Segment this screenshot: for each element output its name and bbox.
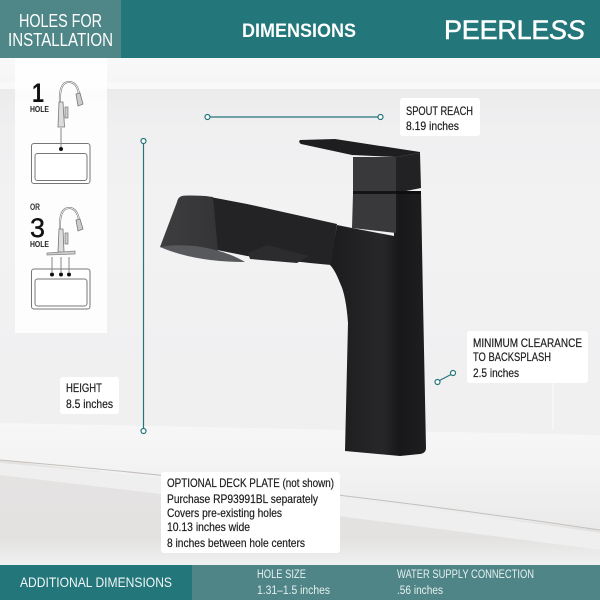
text: water supply connection [397, 569, 534, 597]
neck [205, 196, 337, 265]
callout: height [60, 377, 119, 414]
column [330, 193, 426, 456]
text: hole size [257, 569, 330, 597]
lower block [352, 194, 396, 233]
text: hole size: 1.31–1.5 inches [257, 585, 330, 597]
callout: optional deck plate: OPTIONAL DECK PLATE (not shown) [167, 476, 334, 490]
text: water supply connection: WATER SUPPLY CONNECTION [397, 569, 534, 581]
callout: spout reach: 8.19 inches [406, 119, 459, 133]
icon: three hole faucet and sink [30, 202, 90, 309]
text: hole size: HOLE SIZE [257, 569, 306, 581]
heading: holes for installation: HOLES FOR [19, 11, 102, 31]
spray face [160, 245, 245, 262]
callout: minimum clearance: 2.5 inches [473, 366, 519, 380]
faucet product image [160, 139, 426, 456]
icon: three hole faucet and sink: OR [30, 202, 40, 212]
callout: optional deck plate: Covers pre-existing holes [167, 506, 282, 520]
icon: three hole faucet and sink: HOLE [30, 240, 50, 249]
block gap [353, 191, 396, 194]
callout: height: 8.5 inches [66, 397, 113, 411]
panel: holes for installation [15, 58, 107, 333]
lever [299, 139, 420, 157]
icon: three hole faucet and sink: 3 [30, 213, 45, 243]
icon: one hole faucet and sink: 1 [32, 78, 44, 108]
icon: one hole faucet and sink [30, 78, 90, 184]
logo: Peerless: PEERLESS [444, 15, 585, 45]
callout: optional deck plate: 10.13 inches wide [167, 520, 250, 534]
heading: holes for installation [8, 11, 113, 50]
dimension line: backsplash clearance [435, 370, 456, 384]
top header bar [0, 0, 600, 58]
icon: one hole faucet and sink: HOLE [30, 105, 50, 114]
slot [248, 245, 309, 263]
callout: minimum clearance: MINIMUM CLEARANCE [473, 336, 582, 350]
callout: optional deck plate [161, 472, 340, 553]
callout: optional deck plate: 8 inches between hole centers [167, 536, 305, 550]
dimension line: spout reach [205, 114, 383, 120]
callout: spout reach [400, 98, 480, 136]
bottom bar: additional dimensions [0, 565, 600, 600]
text: water supply connection: .56 inches [397, 585, 443, 597]
nozzle [160, 196, 245, 262]
heading: additional dimensions: ADDITIONAL DIMENSIONS [20, 574, 172, 590]
callout: spout reach: SPOUT REACH [406, 104, 473, 118]
callout: height: HEIGHT [66, 381, 103, 395]
heading: holes for installation: INSTALLATION [8, 30, 113, 50]
dimension line: height [141, 138, 146, 434]
title: dimensions: DIMENSIONS [242, 21, 356, 42]
callout: minimum clearance: TO BACKSPLASH [473, 350, 551, 364]
right block [396, 153, 421, 193]
callout: optional deck plate: Purchase RP93991BL separately [167, 492, 318, 506]
callout: minimum clearance [467, 331, 588, 383]
upper block [353, 157, 396, 192]
